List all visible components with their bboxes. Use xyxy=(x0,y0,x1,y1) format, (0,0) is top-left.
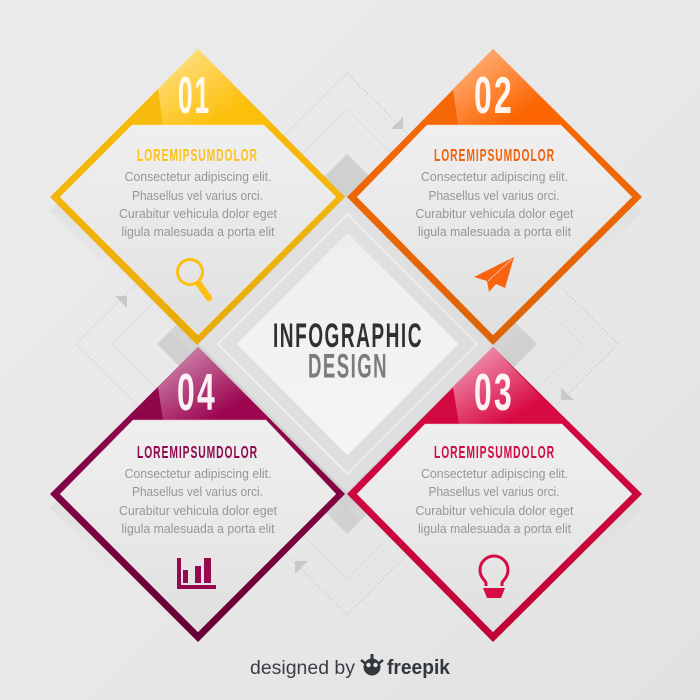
frame xyxy=(347,49,642,345)
thin outline diamond xyxy=(112,109,582,579)
body text xyxy=(119,467,278,536)
icon: light bulb xyxy=(480,556,508,598)
shadow: panel 02 xyxy=(347,63,642,359)
panel 04 xyxy=(50,347,345,642)
content area xyxy=(60,125,336,335)
dotted outline diamond xyxy=(76,73,618,615)
content area xyxy=(60,420,336,632)
body text: Consectetur adipiscing elit. xyxy=(124,467,272,481)
centre light band xyxy=(199,196,495,492)
body text: Curabitur vehicula dolor eget xyxy=(119,504,278,518)
arrowhead top right xyxy=(391,117,403,129)
heading: LOREMIPSUMDOLOR xyxy=(434,442,555,462)
body text: Phasellus vel varius orci. xyxy=(132,189,263,203)
number tab gloss xyxy=(453,347,567,424)
panel 01 xyxy=(50,49,345,345)
body text: Curabitur vehicula dolor eget xyxy=(416,207,574,221)
body text: ligula malesuada a porta elit xyxy=(122,522,275,536)
number tab gloss xyxy=(158,49,272,125)
credit text: designed by xyxy=(250,658,356,679)
number: 02 xyxy=(474,67,514,125)
icon: magnifier xyxy=(178,260,209,298)
brand name: freepik xyxy=(387,657,451,679)
number tab gloss xyxy=(453,49,569,125)
centre diamond xyxy=(199,196,495,492)
heading: LOREMIPSUMDOLOR xyxy=(434,145,555,165)
main title: INFOGRAPHIC xyxy=(273,317,423,355)
panel 03 xyxy=(347,347,642,642)
arrowhead bottom xyxy=(295,561,308,574)
sub title: DESIGN xyxy=(308,348,388,386)
body text: Curabitur vehicula dolor eget xyxy=(416,504,574,518)
body text: ligula malesuada a porta elit xyxy=(122,225,275,239)
body text xyxy=(119,170,278,239)
icon: paper plane xyxy=(474,257,514,292)
heading: LOREMIPSUMDOLOR xyxy=(137,442,258,462)
heading: LOREMIPSUMDOLOR xyxy=(137,145,258,165)
centre backdrop: grey diamond xyxy=(157,154,537,534)
body text: Phasellus vel varius orci. xyxy=(132,485,263,499)
number: 03 xyxy=(474,364,514,422)
frame xyxy=(50,49,345,345)
icon: bar chart xyxy=(177,558,216,589)
number: 04 xyxy=(177,364,217,422)
body text: Consectetur adipiscing elit. xyxy=(124,170,272,184)
shadow: panel 03 xyxy=(347,361,642,656)
shadow: panel 01 xyxy=(50,63,345,359)
body text: ligula malesuada a porta elit xyxy=(418,225,572,239)
content area xyxy=(357,424,632,632)
centre white outline xyxy=(218,214,478,474)
frame xyxy=(50,347,345,642)
number tab gloss xyxy=(158,347,271,420)
panel 02 xyxy=(347,49,642,345)
footer credit xyxy=(250,654,451,679)
frame xyxy=(347,347,642,642)
body text: Consectetur adipiscing elit. xyxy=(421,467,568,481)
number: 01 xyxy=(178,67,211,125)
body text xyxy=(416,467,574,536)
centre core xyxy=(236,233,458,455)
content area xyxy=(357,125,632,335)
body text: Consectetur adipiscing elit. xyxy=(421,170,568,184)
body text: Curabitur vehicula dolor eget xyxy=(119,207,278,221)
arrowhead left xyxy=(115,296,127,308)
body text xyxy=(416,170,574,239)
body text: Phasellus vel varius orci. xyxy=(428,189,560,203)
body text: Phasellus vel varius orci. xyxy=(428,485,560,499)
arrowhead right xyxy=(561,388,574,400)
shadow: panel 04 xyxy=(50,361,345,656)
icon: freepik mascot xyxy=(361,654,383,676)
body text: ligula malesuada a porta elit xyxy=(418,522,572,536)
